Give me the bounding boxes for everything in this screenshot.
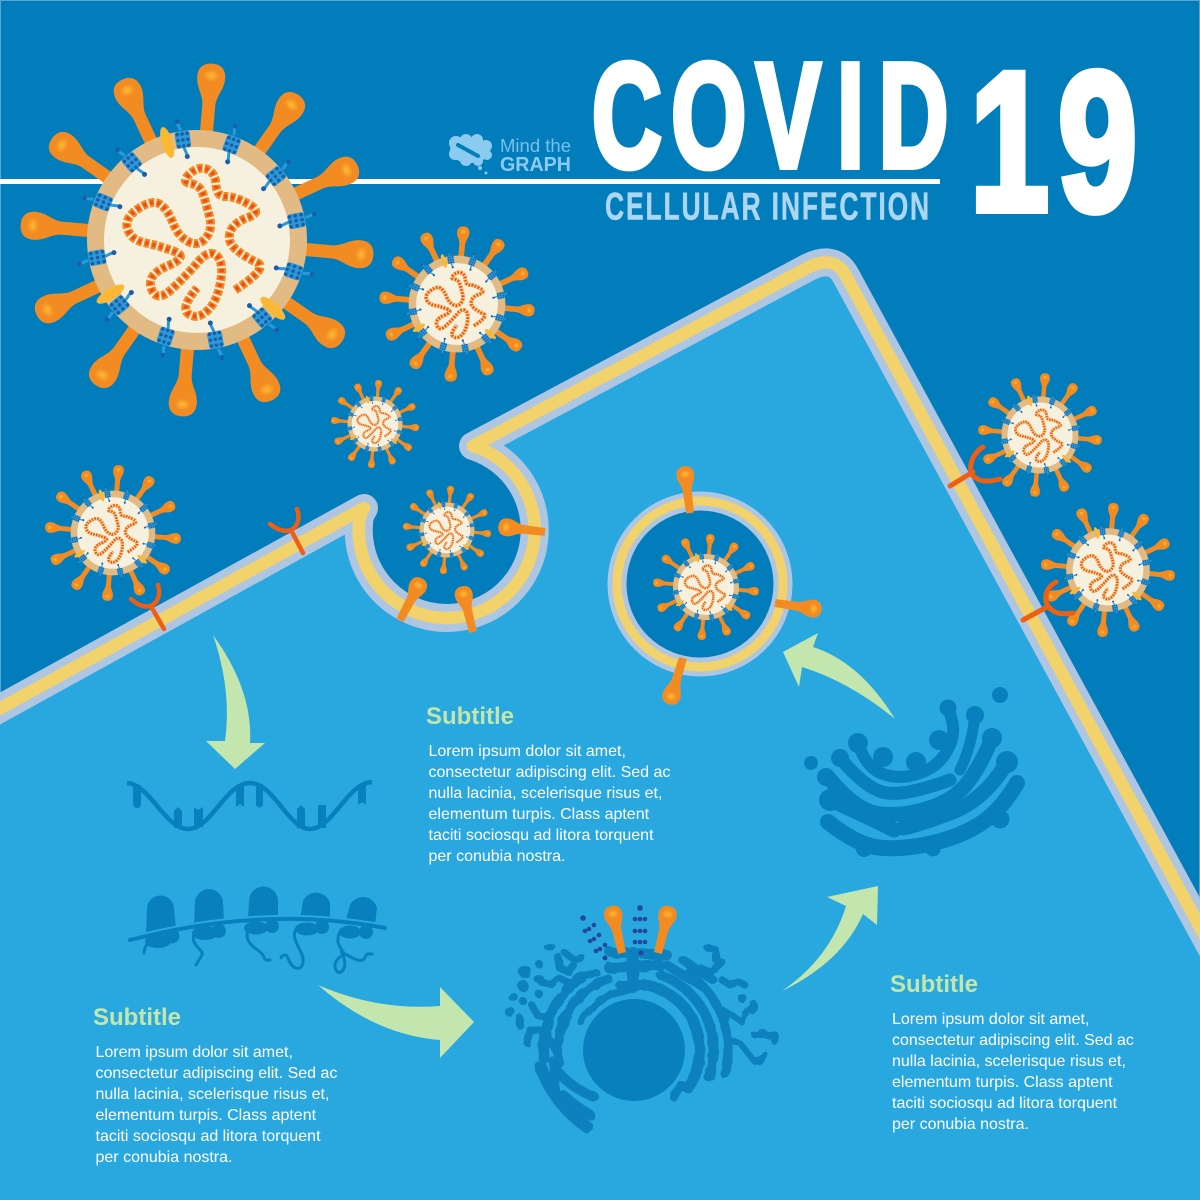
arrow: golgi to vesicle <box>783 633 895 719</box>
subtitle: Subtitle <box>426 703 514 730</box>
virus: medium upper <box>379 226 535 382</box>
virus: inside vesicle <box>653 534 759 640</box>
body text: Lorem ipsum dolor sit amet, <box>892 1011 1089 1028</box>
logo wordmark <box>500 136 571 176</box>
virus: left near membrane <box>45 465 181 601</box>
body text: taciti sociosqu ad litora torquent <box>428 827 654 844</box>
arrow: ER to golgi <box>782 886 878 991</box>
virus: in endocytic pocket <box>403 486 491 574</box>
pocket spike proteins <box>392 517 546 634</box>
text block: top subtitle <box>426 703 670 865</box>
body text: elementum turpis. Class aptent <box>428 806 650 823</box>
icon: brain cloud <box>449 134 492 174</box>
logo wordmark: Mind the <box>500 136 571 156</box>
body text: per conubia nostra. <box>892 1116 1029 1133</box>
panel: host cell with membrane <box>0 262 1200 1200</box>
body text: per conubia nostra. <box>428 848 565 865</box>
virus: right upper <box>978 373 1102 497</box>
receptors on membrane <box>131 447 1073 629</box>
body text: consectetur adipiscing elit. Sed ac <box>892 1032 1134 1049</box>
body text: Lorem ipsum dolor sit amet, <box>96 1044 293 1061</box>
logo: Mind the Graph <box>449 134 571 176</box>
text block: bottom right <box>890 971 1134 1133</box>
title: 19: 19 <box>970 31 1137 252</box>
virus: right lower <box>1041 503 1175 637</box>
body text: taciti sociosqu ad litora torquent <box>892 1095 1118 1112</box>
title: COVID: COVID <box>592 34 948 199</box>
icon: endoplasmic reticulum and nucleus <box>504 904 778 1127</box>
body text: elementum turpis. Class aptent <box>892 1074 1113 1091</box>
nucleus <box>583 999 685 1101</box>
body text: elementum turpis. Class aptent <box>96 1107 317 1124</box>
endosome vesicle <box>617 465 823 707</box>
body text: nulla lacinia, scelerisque risus et, <box>892 1053 1126 1070</box>
logo wordmark: GRAPH <box>500 154 571 176</box>
body text: per conubia nostra. <box>96 1149 232 1166</box>
body text: consectetur adipiscing elit. Sed ac <box>428 764 670 781</box>
icon: viral RNA strand <box>127 782 372 829</box>
membrane protein dots <box>580 905 647 960</box>
arrow: entry to RNA <box>206 635 265 769</box>
body text: nulla lacinia, scelerisque risus et, <box>96 1086 329 1103</box>
subtitle: cellular infection: CELLULAR INFECTION <box>605 186 931 229</box>
arrow: ribosomes to ER <box>318 985 474 1058</box>
text block: bottom left <box>93 1004 337 1166</box>
virus: large <box>19 62 375 418</box>
body text: consectetur adipiscing elit. Sed ac <box>96 1065 337 1082</box>
body text: nulla lacinia, scelerisque risus et, <box>428 785 662 802</box>
subtitle: Subtitle <box>890 971 978 998</box>
virus: small upper <box>331 380 419 468</box>
header rule <box>0 179 940 184</box>
icon: ribosomes on mRNA <box>130 886 385 972</box>
icon: golgi apparatus <box>804 687 1018 857</box>
body text: taciti sociosqu ad litora torquent <box>96 1128 321 1145</box>
subtitle: Subtitle <box>93 1004 181 1031</box>
spike proteins on ER <box>602 904 679 955</box>
body text: Lorem ipsum dolor sit amet, <box>428 743 626 760</box>
